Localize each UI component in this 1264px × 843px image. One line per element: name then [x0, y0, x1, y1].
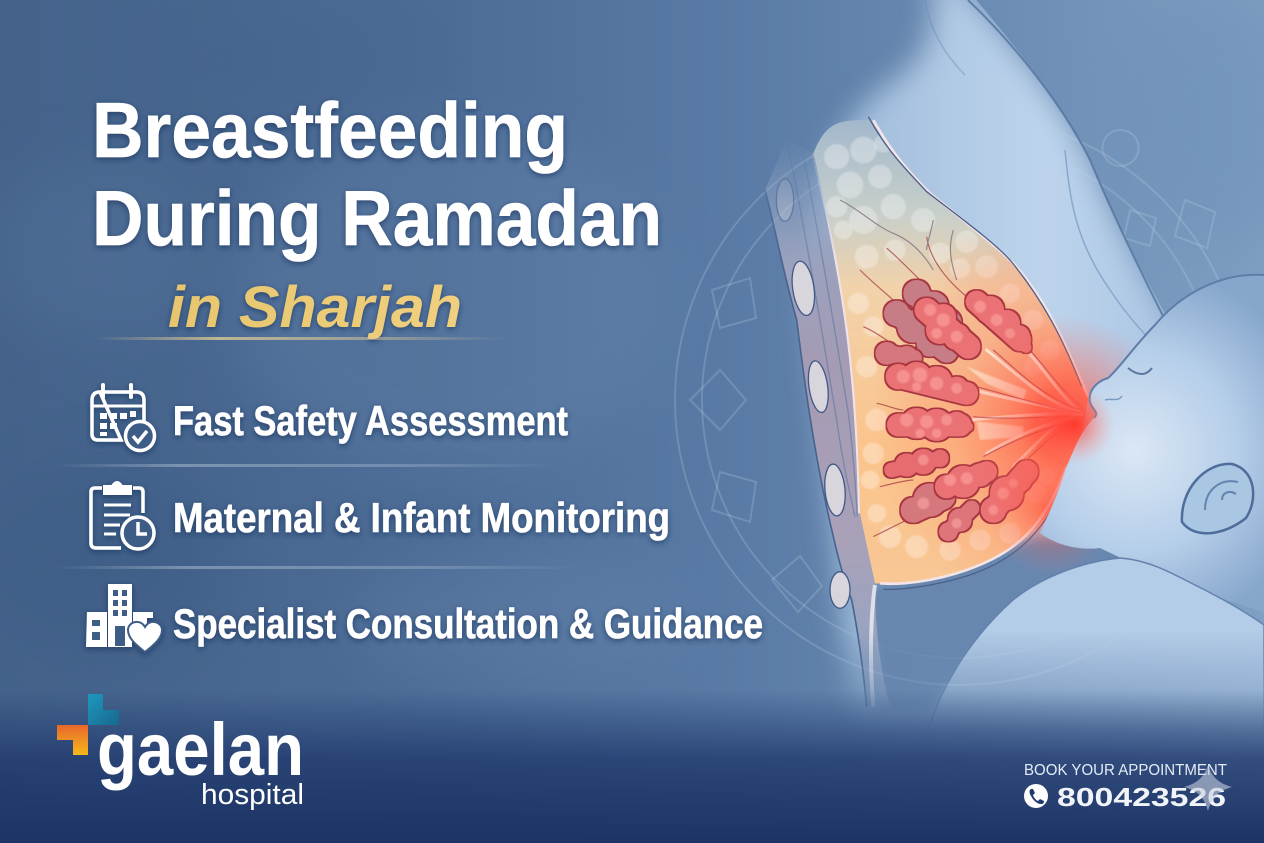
footer band: [0, 690, 1264, 843]
item text: Fast Safety Assessment: [173, 397, 568, 444]
item text: Specialist Consultation & Guidance: [173, 600, 763, 647]
item: Fast Safety Assessment: [92, 385, 568, 450]
contact block: BOOK YOUR APPOINTMENT: [1024, 762, 1228, 779]
item: Maternal & Infant Monitoring: [91, 482, 670, 549]
logo: gaelan hospital: [57, 694, 304, 811]
illustration figure with soft fade at bottom: [765, 0, 1264, 780]
glow on baby's cheek: [1042, 391, 1111, 461]
baby's ear: [1182, 464, 1253, 533]
subtitle: in Sharjah: in Sharjah: [168, 275, 462, 340]
red glow at nipple: [966, 322, 1130, 568]
title: [92, 86, 662, 262]
breast outline: [873, 120, 1088, 584]
lobules: [875, 280, 1033, 541]
title: During Ramadan: [92, 174, 662, 262]
title: Breastfeeding: [92, 86, 568, 174]
decorative sparkle: [1184, 765, 1232, 811]
breast anatomy cross-section: [765, 113, 1120, 707]
contact block: [1024, 762, 1232, 812]
logo cross mark: [57, 694, 119, 755]
icon: phone: [1024, 784, 1048, 808]
milk ducts: [970, 343, 1082, 467]
logo: gaelan hospital: hospital: [201, 779, 304, 811]
icon: calendar with check: [92, 385, 154, 450]
icon: hospital with heart: [86, 584, 162, 652]
baby: [925, 275, 1264, 740]
decorative ornamental ring: [675, 115, 1245, 685]
chest wall with lymph nodes: [765, 140, 890, 707]
baby's arm: [932, 557, 1264, 718]
mother's torso: [802, 0, 1164, 716]
icon: clipboard with clock: [91, 482, 154, 549]
glandular tissue and fat: [814, 120, 1088, 584]
item text: Maternal & Infant Monitoring: [173, 494, 670, 541]
item: Specialist Consultation & Guidance: [86, 584, 763, 652]
contact block: 800423526: [1057, 782, 1226, 812]
logo: gaelan hospital: gaelan: [97, 708, 304, 791]
